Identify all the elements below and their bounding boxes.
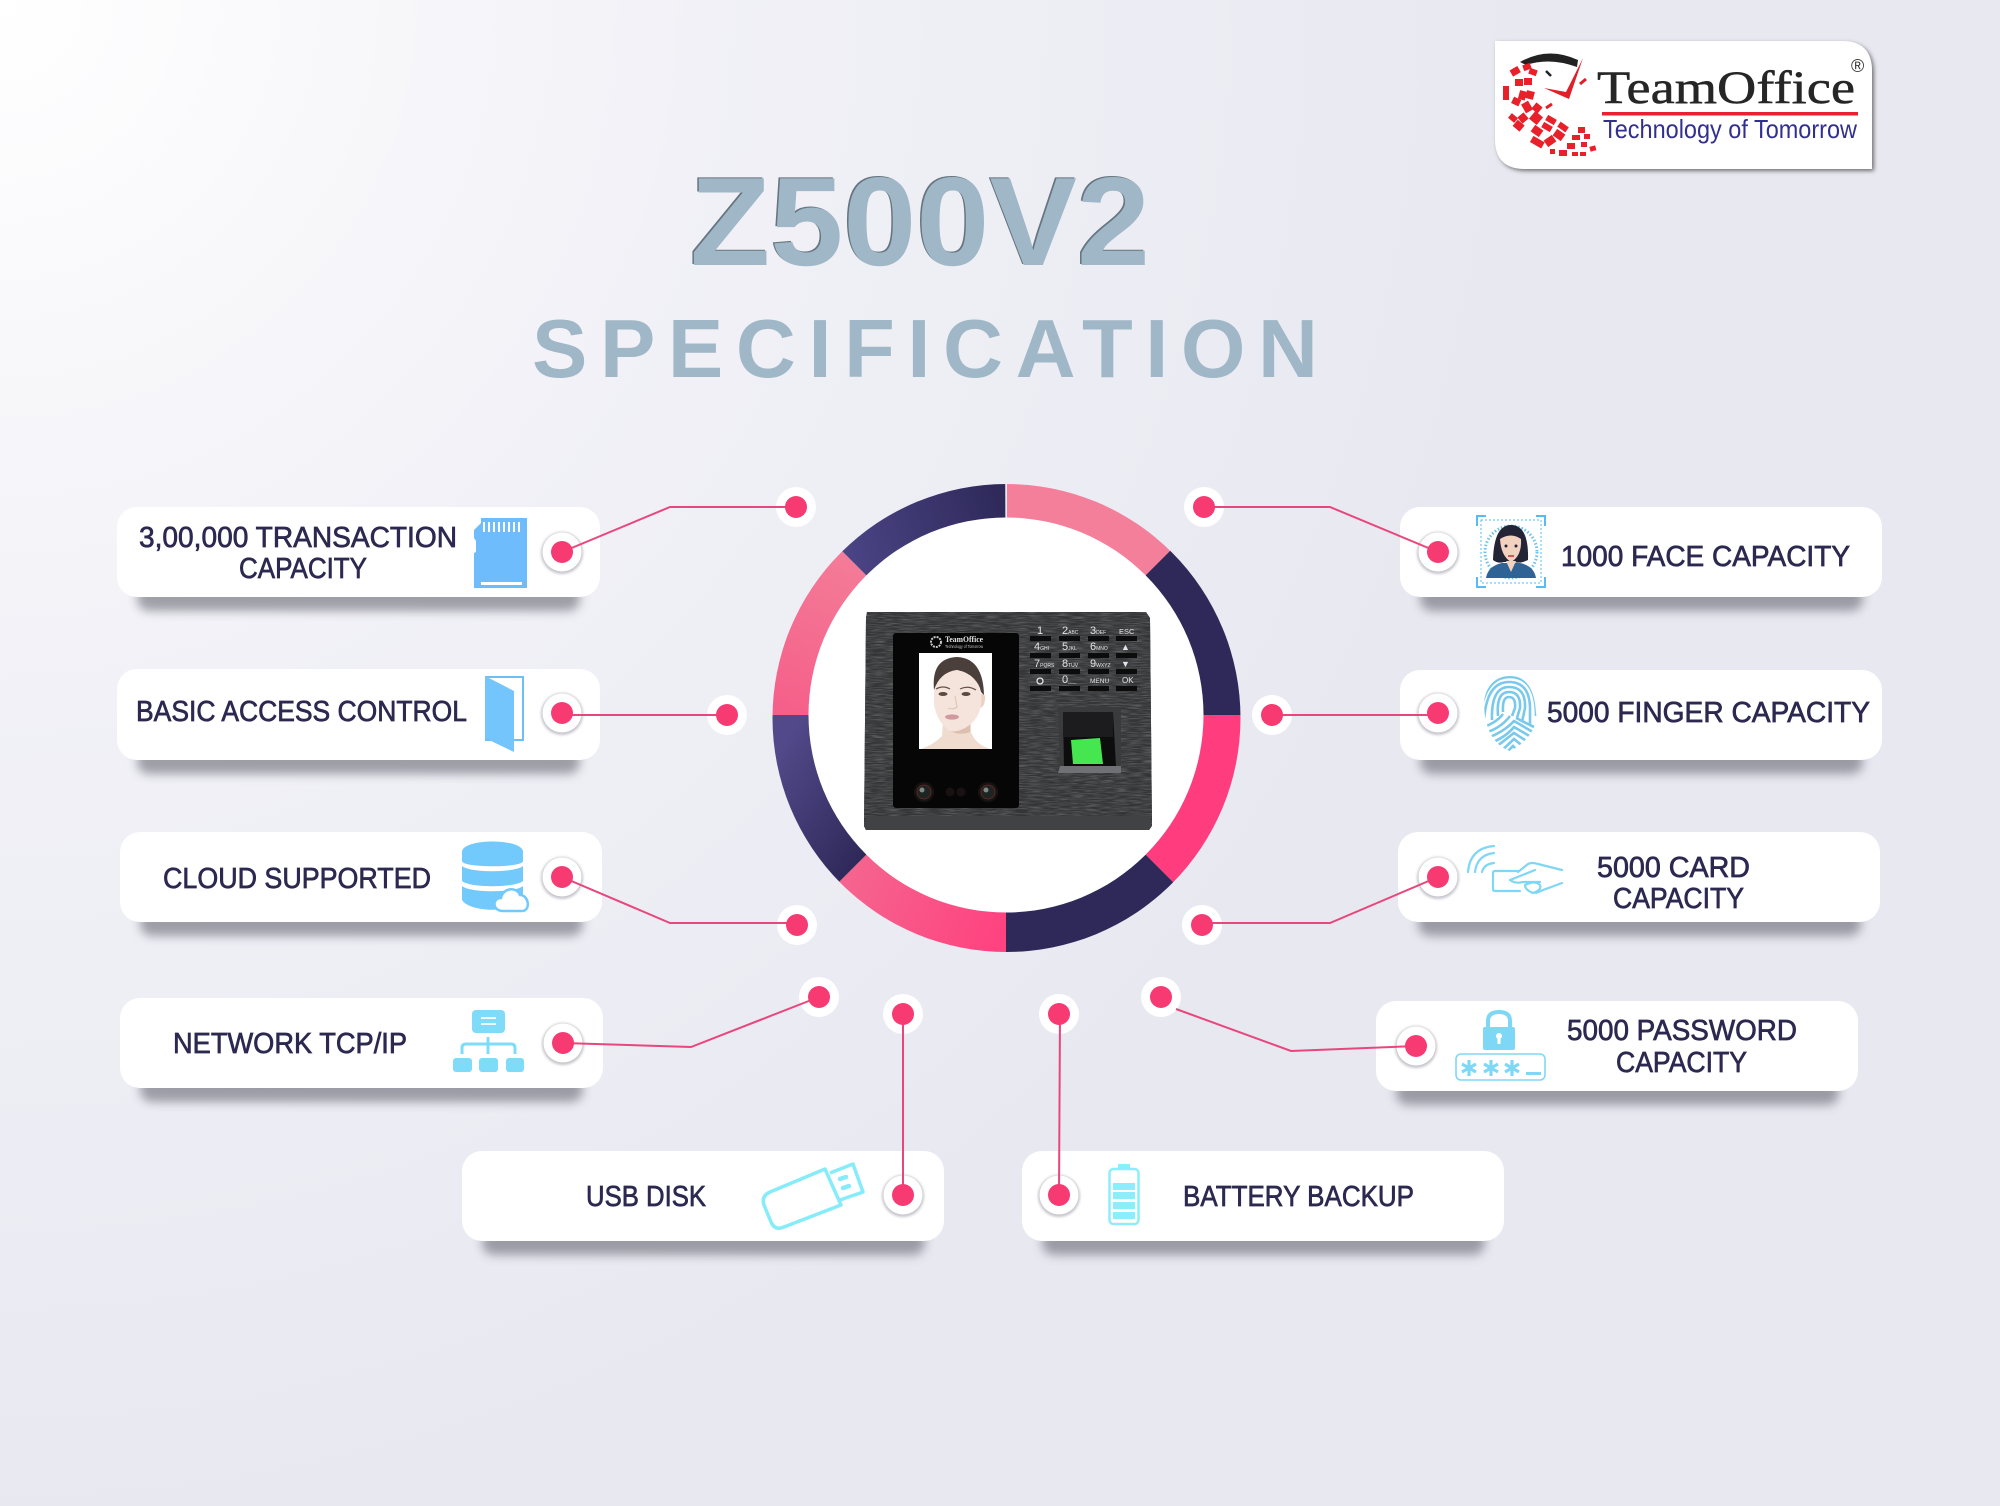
device keypad: 2ABC xyxy=(1062,625,1079,637)
dot halo xyxy=(882,1175,924,1217)
dot halo xyxy=(1417,532,1459,574)
icon: padlock and password xyxy=(1456,1012,1545,1080)
card: network TCP/IP xyxy=(120,998,603,1102)
device keypad: 1 xyxy=(1037,625,1043,637)
dot halo xyxy=(1038,1175,1080,1217)
dot halo xyxy=(1417,857,1459,899)
card: 5000 finger capacity xyxy=(1400,670,1882,774)
card: USB disk xyxy=(462,1151,944,1255)
dot halo xyxy=(541,857,583,899)
device screen: Technology of Tomorrow xyxy=(945,644,984,649)
device keypad: 7PQRS xyxy=(1034,658,1055,670)
dot halo xyxy=(542,1023,584,1065)
label: 5000 CARD xyxy=(1597,852,1750,884)
card: cloud supported xyxy=(120,832,602,936)
icon: clock of red pixels xyxy=(1503,53,1596,156)
dot halo xyxy=(541,693,583,735)
icon: network tree xyxy=(453,1010,524,1072)
card: 1000 face capacity xyxy=(1400,507,1882,611)
icon: SD card xyxy=(474,518,527,588)
label: CAPACITY xyxy=(239,553,367,585)
device keypad xyxy=(1030,625,1137,691)
icon: fingerprint xyxy=(1484,676,1536,751)
device keypad: 5JKL xyxy=(1062,641,1077,653)
title: Z500V2 xyxy=(688,150,1148,291)
label: 3,00,000 TRANSACTION xyxy=(139,522,457,554)
label: CAPACITY xyxy=(1616,1047,1747,1079)
label: NETWORK TCP/IP xyxy=(173,1028,407,1060)
label xyxy=(1567,1015,1797,1079)
icon: door xyxy=(485,676,523,752)
dot halo xyxy=(541,532,583,574)
label: BATTERY BACKUP xyxy=(1183,1181,1414,1213)
logo tagline: Technology of Tomorrow xyxy=(1603,114,1857,144)
device keypad: ▼ xyxy=(1121,659,1130,669)
device screen: TeamOffice xyxy=(945,635,983,644)
device keypad: 6MNO xyxy=(1090,641,1108,653)
device keypad: 4GHI xyxy=(1034,641,1049,653)
card: 5000 card capacity xyxy=(1398,832,1880,936)
card: 3,00,000 transaction capacity xyxy=(117,507,600,611)
red rule xyxy=(1602,112,1858,116)
dot halo xyxy=(1395,1026,1437,1068)
device keypad: 0___ xyxy=(1062,674,1077,686)
card: 5000 password capacity xyxy=(1376,1001,1858,1105)
icon: battery xyxy=(1110,1164,1138,1224)
icon: face scan xyxy=(1477,516,1545,587)
device keypad: 3DEF xyxy=(1090,625,1106,637)
device keypad: 8TUV xyxy=(1062,658,1079,670)
dot halo xyxy=(1417,693,1459,735)
label: CLOUD SUPPORTED xyxy=(163,863,431,895)
fingerprint sensor xyxy=(1058,707,1121,773)
device keypad: 9WXYZ xyxy=(1090,658,1111,670)
logo wordmark: TeamOffice xyxy=(1597,62,1855,114)
logo: TeamOffice xyxy=(1495,41,1872,169)
label: 5000 FINGER CAPACITY xyxy=(1547,697,1870,729)
label: CAPACITY xyxy=(1613,883,1744,915)
device keypad: OK xyxy=(1122,676,1134,685)
registered mark: ® xyxy=(1851,56,1864,76)
label: 5000 PASSWORD xyxy=(1567,1015,1797,1047)
label: 1000 FACE CAPACITY xyxy=(1561,541,1850,573)
device screen xyxy=(893,633,1019,808)
subtitle: SPECIFICATION xyxy=(532,302,1318,395)
device keypad: ESC xyxy=(1119,627,1135,636)
device keypad: ▲ xyxy=(1121,642,1130,652)
device keypad: MENU xyxy=(1090,678,1109,685)
label xyxy=(139,522,457,585)
connectors xyxy=(551,487,1449,1206)
icon: contactless card in hand xyxy=(1468,846,1562,893)
label xyxy=(1597,852,1750,915)
title: Z500V2 xyxy=(690,151,1150,292)
label: USB DISK xyxy=(586,1181,707,1213)
card: basic access control xyxy=(117,669,600,774)
label: BASIC ACCESS CONTROL xyxy=(136,696,467,728)
photo of a woman xyxy=(919,653,992,749)
icon: cloud database xyxy=(462,842,528,911)
icon: USB stick xyxy=(763,1164,863,1228)
device: Z500V2 terminal xyxy=(864,612,1152,830)
ring: eight segment donut xyxy=(772,484,1240,952)
card: battery backup xyxy=(1022,1151,1504,1255)
